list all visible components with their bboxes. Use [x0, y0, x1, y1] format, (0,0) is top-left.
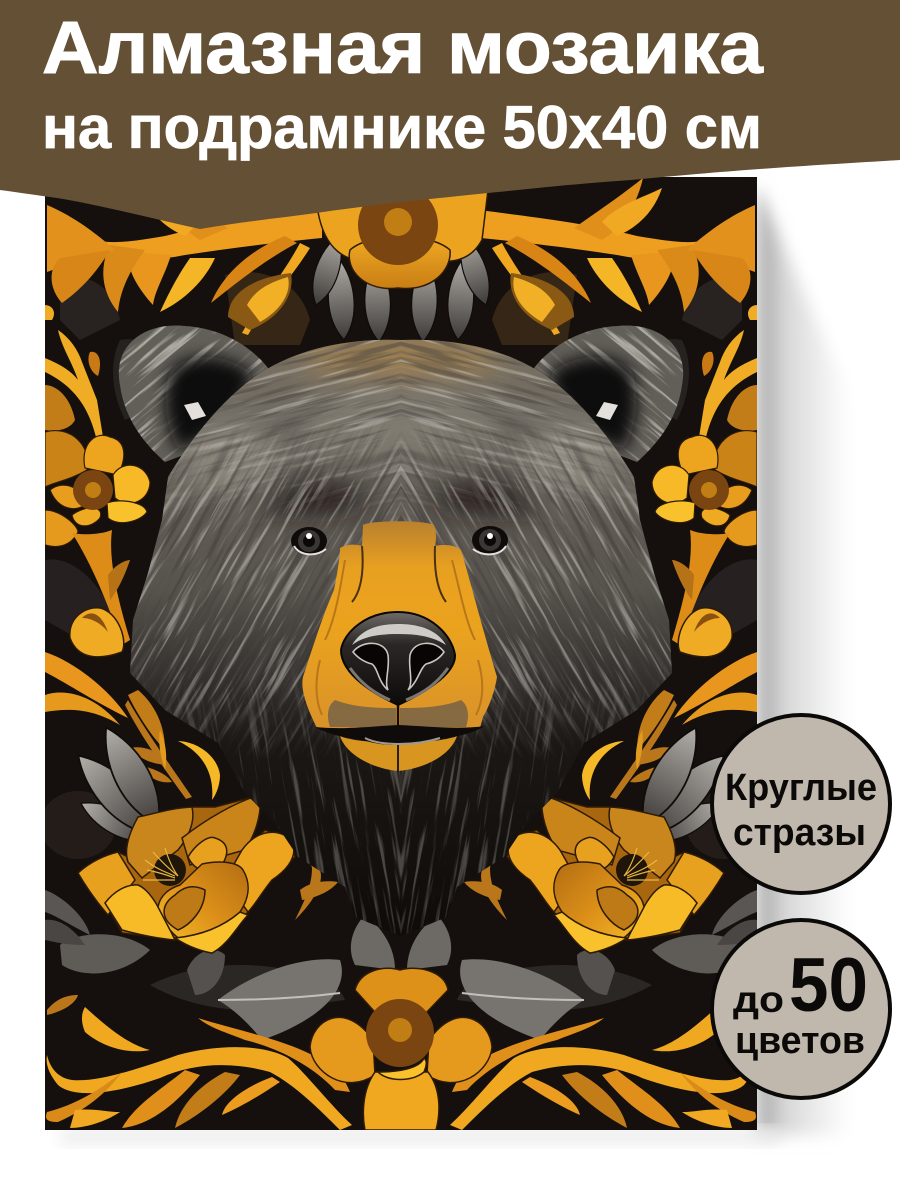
small bud: [70, 608, 124, 657]
left half ornaments: [40, 178, 395, 1130]
badge text do: до: [733, 979, 784, 1020]
right half ornaments mirrored: [407, 178, 762, 1130]
canvas drop shadow: [60, 185, 850, 1144]
nose: [341, 612, 455, 705]
header banner: [0, 0, 900, 229]
eyes: [291, 526, 508, 555]
badge text colours: цветов: [735, 1020, 865, 1062]
gray side wing: [66, 719, 173, 851]
mouth: [315, 705, 485, 745]
left eye: [291, 527, 327, 555]
badge text line 1: Круглые: [725, 767, 877, 809]
head fur shading: [130, 340, 672, 934]
badge number 50: 50: [789, 943, 868, 1028]
lower left scrolls: [45, 652, 165, 750]
left middle flower: [45, 431, 150, 547]
painting canvas: [45, 177, 757, 1130]
top gray feathers: [313, 244, 489, 340]
left side stem: [72, 530, 130, 645]
badge text line 2: стразы: [733, 812, 866, 854]
right eye: [472, 526, 508, 554]
large left flower: [78, 795, 295, 953]
title line 2: на подрамнике 50х40 см: [42, 94, 762, 161]
yellow crescent: [178, 741, 220, 800]
gold bud top left: [228, 273, 292, 330]
right fur streaks mirrored: [401, 340, 672, 934]
top flower: [318, 185, 488, 288]
stem sprig: [295, 815, 338, 920]
muzzle: [302, 521, 497, 733]
chin: [340, 736, 457, 772]
bear head: [130, 340, 672, 934]
gold sprig: [125, 700, 192, 799]
left ear: [118, 326, 684, 462]
left yellow curls: [45, 305, 103, 437]
bottom flower: [310, 968, 492, 1130]
top orange scrolls: [47, 178, 322, 335]
badge: up to 50 colours: [712, 920, 890, 1098]
bottom scrolls: [46, 995, 352, 1130]
badge: round rhinestones: [712, 715, 890, 893]
gray lower leaves: [45, 890, 395, 1040]
left fur streaks: [130, 340, 672, 934]
dark foliage background: [40, 272, 345, 1010]
title line 1: Алмазная мозаика: [42, 6, 764, 89]
